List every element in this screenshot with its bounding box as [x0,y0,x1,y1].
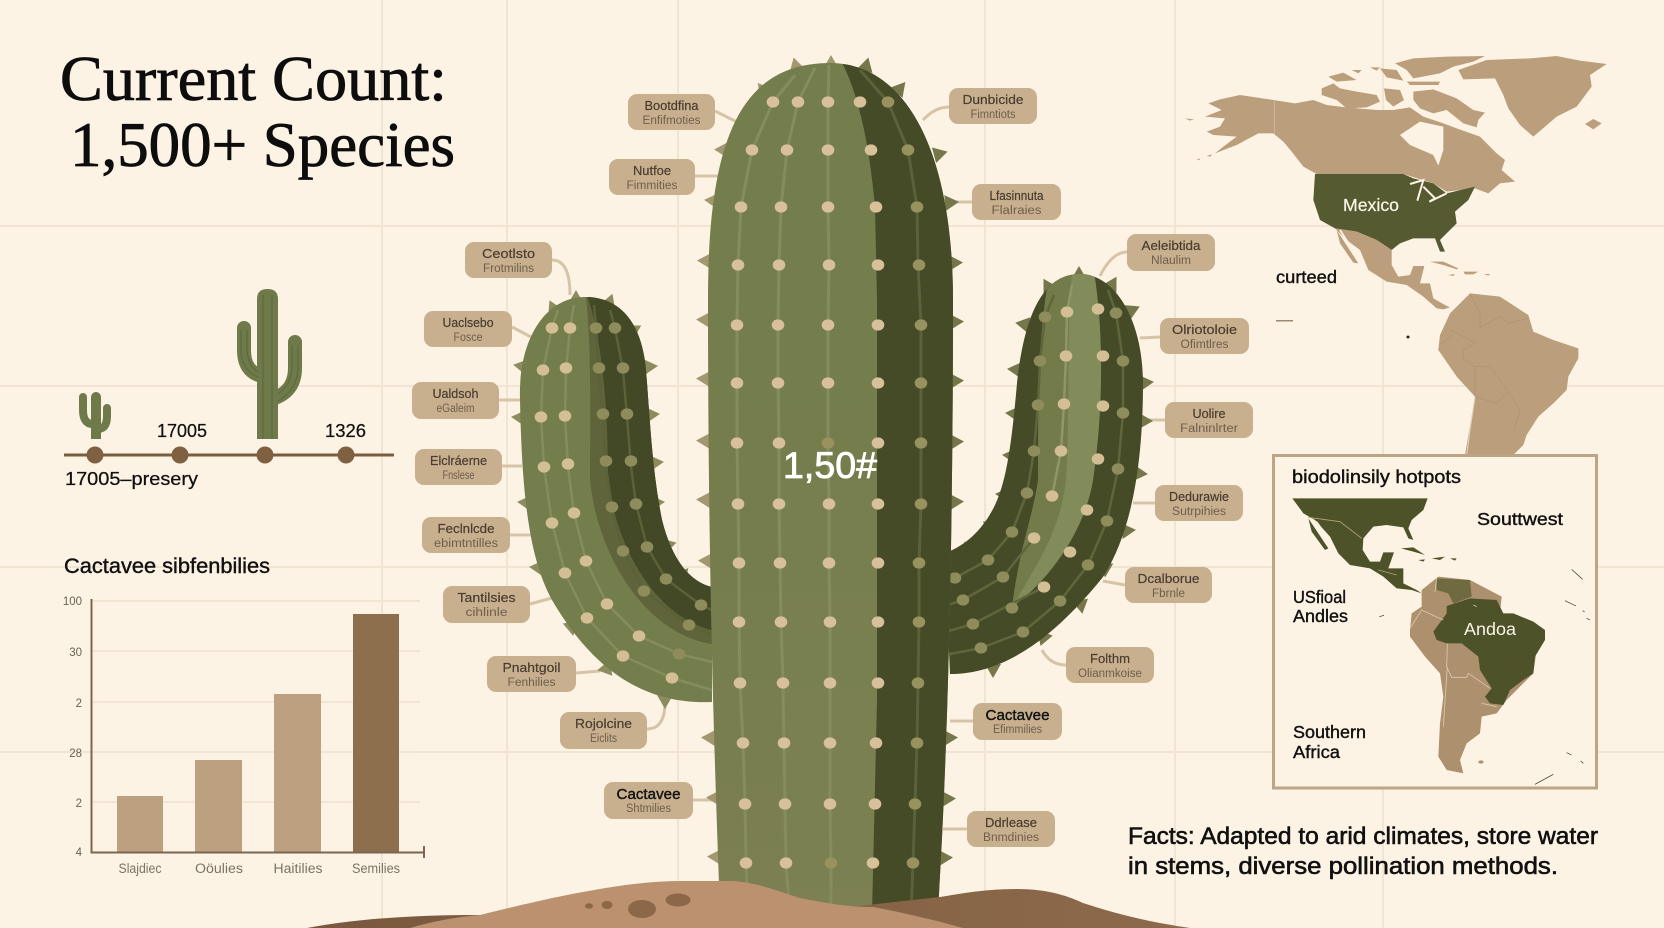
label 13 [972,184,1061,220]
chart axes [92,599,424,858]
label 21 [967,811,1055,847]
main trunk [700,55,965,915]
x axis labels: Oöulies [195,861,243,876]
label 7: Feclnlcde [438,521,494,536]
label 17: Sutrpihies [1172,506,1226,518]
y axis labels: 4 [76,847,83,859]
bar chart: Cactavee subfamilies [63,555,424,876]
label 1 [628,94,715,130]
label 11: Cactavee [616,787,680,803]
y axis labels: 28 [69,748,82,760]
left arm areoles [535,322,678,684]
cactus illustration [500,55,1160,915]
map annotation [1276,267,1410,338]
label 3: Ceotlsto [482,246,535,261]
front dune [410,881,963,928]
label 3: Frotmilins [483,263,534,275]
inset labels: Souttwest [1477,509,1563,529]
chart heading: Cactavee sibfenbilies [64,555,270,578]
y axis labels [63,596,83,859]
facts text: Facts: Adapted to arid climates, store water [1128,823,1598,850]
label 12: Fimntiots [970,109,1016,121]
label 7 [422,517,510,553]
label 14: Aeleibtida [1142,238,1201,253]
label 15: Olriotoloie [1172,322,1237,337]
right arm areoles [949,307,1129,654]
label 1: Bootdfina [644,98,699,113]
label 1: Enfifmoties [642,115,701,127]
label 5: eGaleim [436,403,474,415]
label 13: Lfasinnuta [990,188,1044,203]
label 4: Fosce [454,332,482,344]
Mexico and Central America [1335,228,1490,309]
label 21: Bnmdinies [983,832,1039,844]
label 8: cihlinle [466,607,508,619]
timeline labels: 1326 [325,420,366,441]
Great Lakes [1410,180,1447,202]
label 11 [604,782,693,819]
label 2: Nutfoe [633,163,671,178]
x axis labels: Haitilies [274,861,323,876]
inset labels: Andles [1293,606,1348,626]
inset labels: Africa [1293,742,1340,762]
label 14 [1127,234,1215,271]
main trunk areoles [731,96,884,869]
label 8 [443,586,530,623]
icon: small cactus [83,392,107,439]
label 10: Eiclits [590,733,617,745]
icon: tall cactus [241,289,298,439]
label 20: Cactavee [986,708,1050,724]
title [60,43,455,180]
left arm spines [510,290,694,709]
timeline labels: 17005–presery [65,468,199,489]
y axis labels: 2 [76,798,82,810]
label 19: Olianmkoise [1078,668,1142,680]
label 5: Ualdsoh [432,386,478,401]
label 20: Efimmilies [993,724,1042,736]
facts text [1128,823,1598,880]
label 9: Pnahtgoil [502,660,561,675]
label 16: Falninlrter [1180,423,1238,435]
inset labels: Andoa [1464,619,1516,639]
title: Current Count: [60,43,447,114]
inset labels: Southern [1293,722,1366,742]
label 5 [412,382,499,419]
South America [1438,293,1578,455]
label 20 [973,703,1062,740]
label 8: Tantilsies [458,590,516,605]
label 3 [465,242,552,278]
rocks [585,894,690,918]
label 13: Flalraies [992,205,1042,217]
inset heading: biodolinsily hotpots [1292,466,1461,487]
label 11: Shtmilies [626,803,671,815]
bars [117,614,399,852]
label 17 [1155,485,1243,521]
map: Americas [1185,56,1607,455]
inset: biodiversity hotspots [1274,456,1596,788]
title: 1,500+ Species [70,109,455,180]
inset labels: USfioal [1293,587,1346,607]
timeline labels: 17005 [157,420,207,441]
timeline panel [64,289,394,489]
facts text: in stems, diverse pollination methods. [1128,853,1558,880]
label 14: Nlaulim [1151,255,1191,267]
back dune [307,889,1190,928]
x axis labels: Slajdiec [118,861,162,876]
desert ground [307,881,1190,928]
label 18 [1125,567,1212,603]
timeline labels [65,420,366,489]
label 6: Elclráerne [430,453,487,468]
label 18: Dcalborue [1138,571,1200,586]
label 15: Ofimtlres [1180,339,1229,351]
left arm [520,297,712,702]
label 21: Ddrlease [985,815,1037,830]
label 12: Dunbicide [962,92,1024,107]
label 7: ebimtntilles [434,538,498,550]
right arm [949,274,1143,674]
United States highlighted region [1313,174,1475,252]
map annotation: curteed [1276,267,1337,287]
label 6 [415,449,502,485]
y axis labels: 2 [76,698,82,710]
main trunk spines [696,55,964,866]
inset map [1292,498,1590,784]
label 16: Uolire [1192,406,1226,421]
species labels [412,88,1253,847]
label 10 [560,712,647,749]
label 19: Folthm [1090,651,1130,666]
x axis labels: Semilies [352,861,400,876]
label 16 [1165,402,1253,438]
label 9 [487,656,576,692]
label 4: Uaclsebo [442,315,494,330]
label 2 [609,159,695,195]
x axis labels [118,861,400,876]
Greenland and Iceland [1458,56,1607,137]
center species count: 1,50# [783,445,877,486]
label 19 [1066,647,1154,683]
label 17: Dedurawie [1169,489,1229,504]
label 4 [424,311,512,347]
Canada and Alaska [1185,56,1515,193]
inset labels [1293,509,1563,762]
label 15 [1160,318,1249,354]
label connectors [499,107,1165,829]
label 10: Rojolcine [575,716,632,731]
label 2: Fimmities [626,180,678,192]
y axis labels: 30 [69,647,82,659]
label 12 [949,88,1037,124]
label 6: Fnslese [442,470,474,482]
timeline axis [64,446,394,464]
y axis labels: 100 [63,596,82,608]
map label Mexico: Mexico [1343,195,1399,215]
right arm spines [957,266,1155,678]
label 9: Fenhilies [508,677,556,689]
label 18: Fbrnle [1152,588,1185,600]
